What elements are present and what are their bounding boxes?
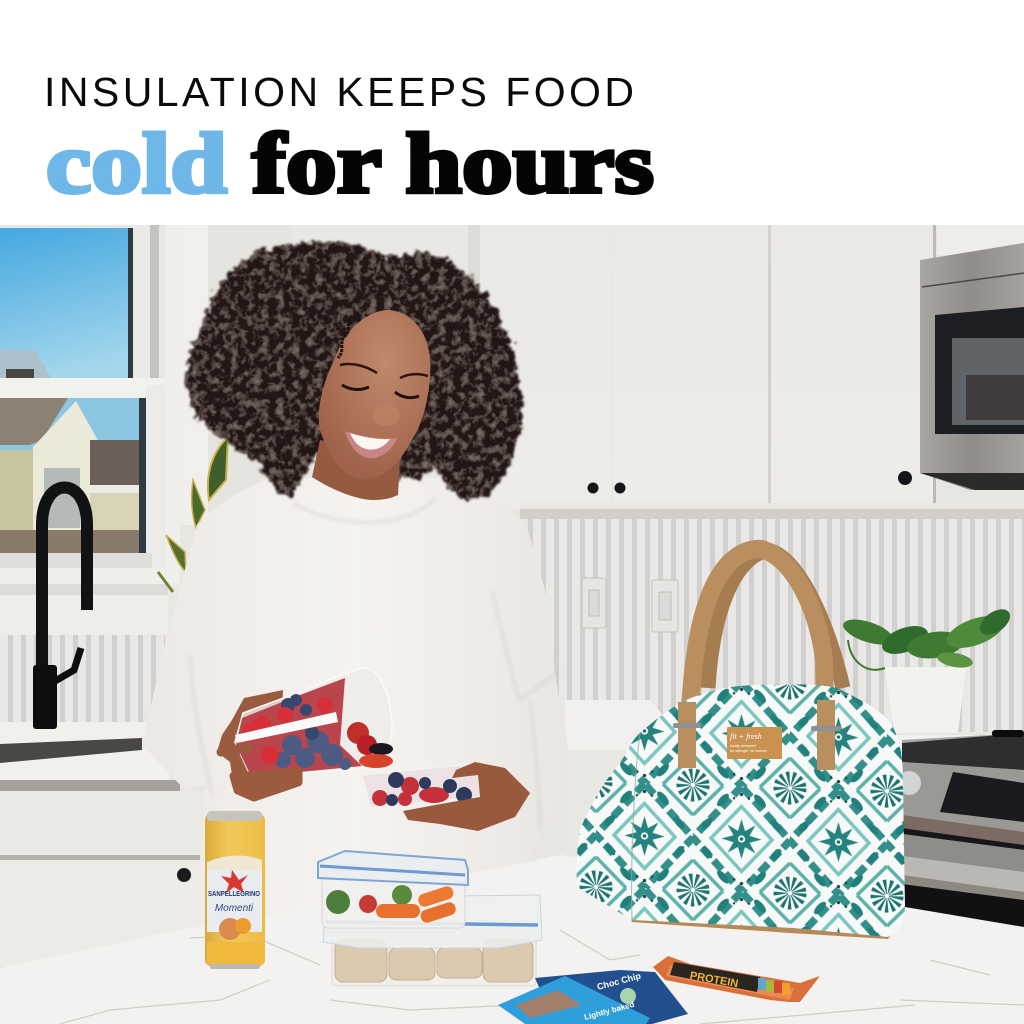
hair — [186, 242, 523, 500]
bag bottom trim — [630, 915, 895, 939]
stove — [897, 730, 1024, 930]
sparkling water can — [205, 811, 265, 969]
face — [319, 310, 430, 479]
sparkling water can: SANPELLEGRINO — [208, 889, 260, 898]
kitchen photo scene — [0, 225, 1024, 1024]
sweater shading — [190, 497, 558, 830]
plant — [840, 604, 1015, 733]
pocket seam — [632, 733, 640, 920]
sweater torso — [142, 478, 568, 930]
beadboard backsplash — [528, 519, 1024, 732]
brand label: fit + fresh — [730, 732, 762, 741]
right counter — [563, 700, 1024, 855]
food containers — [318, 851, 542, 986]
bottom container with wraps — [323, 895, 542, 986]
protein bar: PROTEIN — [689, 970, 739, 990]
small fruit container — [362, 763, 480, 808]
microwave — [920, 243, 1024, 490]
bag body with tile pattern — [577, 684, 905, 937]
left counter and sink — [0, 722, 210, 966]
heading line: insulation keeps food: INSULATION KEEPS FOOD — [44, 69, 634, 115]
back wall — [0, 225, 1024, 1024]
neighbouring house — [0, 398, 139, 553]
island countertop — [0, 855, 1024, 1024]
title — [44, 69, 654, 211]
brand label: for strength, for women — [730, 749, 767, 753]
snack packets: Choc Chip — [596, 970, 642, 992]
light blue packet — [498, 976, 650, 1024]
woman — [142, 242, 568, 930]
top container with vegetables — [318, 851, 468, 928]
marble veins — [60, 930, 1024, 1024]
heading words: for hours: for hours — [252, 115, 654, 211]
heading word: cold: cold — [46, 115, 227, 211]
front handle — [687, 549, 826, 770]
snack packets: Lightly baked — [583, 1000, 635, 1022]
zip tab — [622, 754, 640, 768]
lunch bag — [577, 549, 905, 939]
window — [0, 225, 180, 637]
sparkling water can: Momenti — [215, 903, 254, 914]
left beadboard backsplash — [0, 635, 165, 725]
upper cabinets — [180, 225, 1024, 525]
left hand lower fingers — [221, 748, 298, 797]
tilted fruit container — [235, 668, 393, 775]
hair curl over forehead — [338, 316, 352, 358]
leaves — [840, 604, 1015, 670]
brand label — [727, 727, 782, 759]
berries falling out — [347, 722, 393, 768]
left hand — [217, 690, 300, 797]
smile — [345, 431, 397, 458]
neck — [312, 440, 400, 500]
faucet — [33, 488, 87, 729]
eyes and brows — [340, 364, 428, 426]
right hand — [403, 762, 530, 831]
brand label: locally designed — [730, 744, 756, 748]
header background — [0, 0, 1024, 225]
pot — [885, 667, 966, 733]
handle straps over the bag — [687, 700, 826, 770]
wall outlets — [582, 578, 678, 632]
metal slides — [673, 723, 841, 731]
snack packets — [498, 970, 688, 1024]
dark blue packet — [535, 970, 688, 1024]
protein bar — [653, 956, 820, 1002]
snake plant — [158, 437, 228, 592]
back handle — [708, 550, 843, 688]
